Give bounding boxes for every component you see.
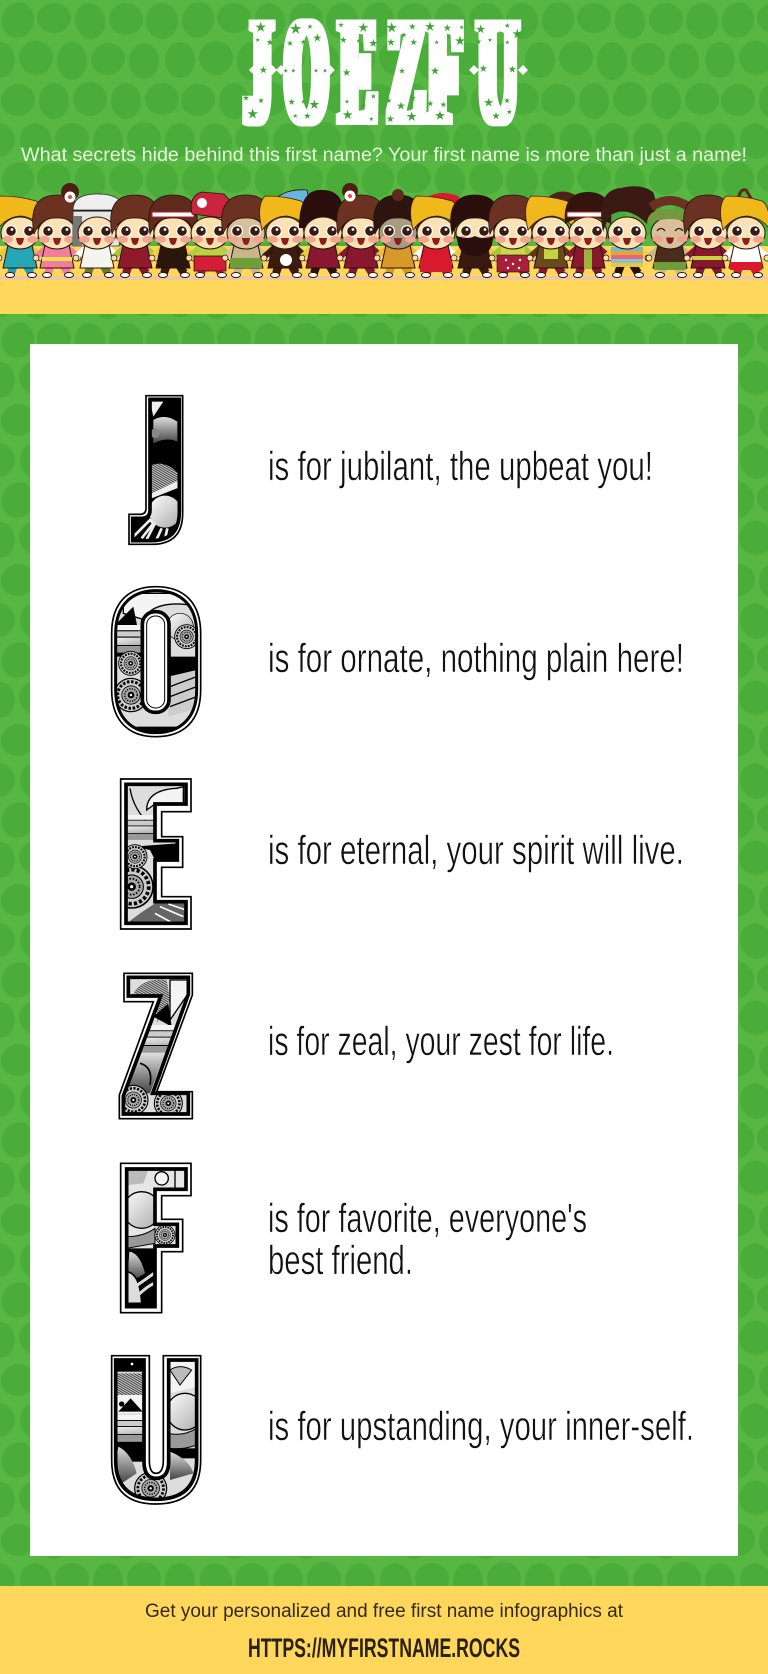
tagline: What secrets hide behind this first name? Your first name is more than just a name! (21, 145, 747, 166)
character 4: maroon robe (111, 195, 159, 278)
letter O (107, 587, 203, 737)
letter U (110, 1354, 202, 1505)
letter E (120, 778, 192, 930)
character 3: white keffiyeh (73, 194, 123, 278)
character 20: blond with red and white dress (721, 190, 768, 278)
character 7: dark skin, grass skirt (222, 195, 270, 278)
character 8: blond with blue cap and dark robe (260, 190, 311, 278)
character 14: polka-dot skirt (489, 195, 537, 278)
text: row F: best friend. (268, 1237, 413, 1283)
letter J (129, 396, 183, 544)
letter Z (117, 973, 193, 1120)
row of cartoon characters (0, 183, 768, 278)
character 12: blond with red hat, red dress (411, 193, 460, 278)
text: row F (268, 1195, 587, 1283)
character 9: tall black hair, maroon suit (299, 190, 347, 278)
character 13: black beard and dark robe (451, 195, 499, 278)
yellow ground band (0, 246, 768, 314)
text: row F: is for favorite, everyone's (268, 1195, 587, 1241)
character 16: headband, maroon and green robe (564, 192, 612, 278)
text: row Z: is for zeal, your zest for life. (268, 1018, 614, 1064)
footer line: Get your personalized and free first name infographics at (145, 1601, 624, 1622)
character 2: pink kimono with flower bun (33, 183, 81, 278)
footer band (0, 1586, 768, 1674)
character 19: maroon robe with angry brow (684, 195, 732, 278)
footer url: HTTPS://MYFIRSTNAME.ROCKS (248, 1633, 520, 1663)
character 1: blond in teal overalls (0, 196, 44, 278)
character 18: green headdress, closed eyes (646, 200, 694, 278)
main white panel (30, 344, 738, 1556)
character 5: headband and black top (149, 195, 197, 278)
character 11: dark skin, orange robe (374, 189, 422, 278)
character 17: black spiky hair, rainbow shirt (601, 186, 656, 278)
character 10: maroon dress with flower bun (337, 183, 385, 278)
character 15: spiky blond, green top (526, 191, 577, 278)
character 6: red fez and skirt (186, 192, 235, 278)
letter F (121, 1163, 191, 1313)
